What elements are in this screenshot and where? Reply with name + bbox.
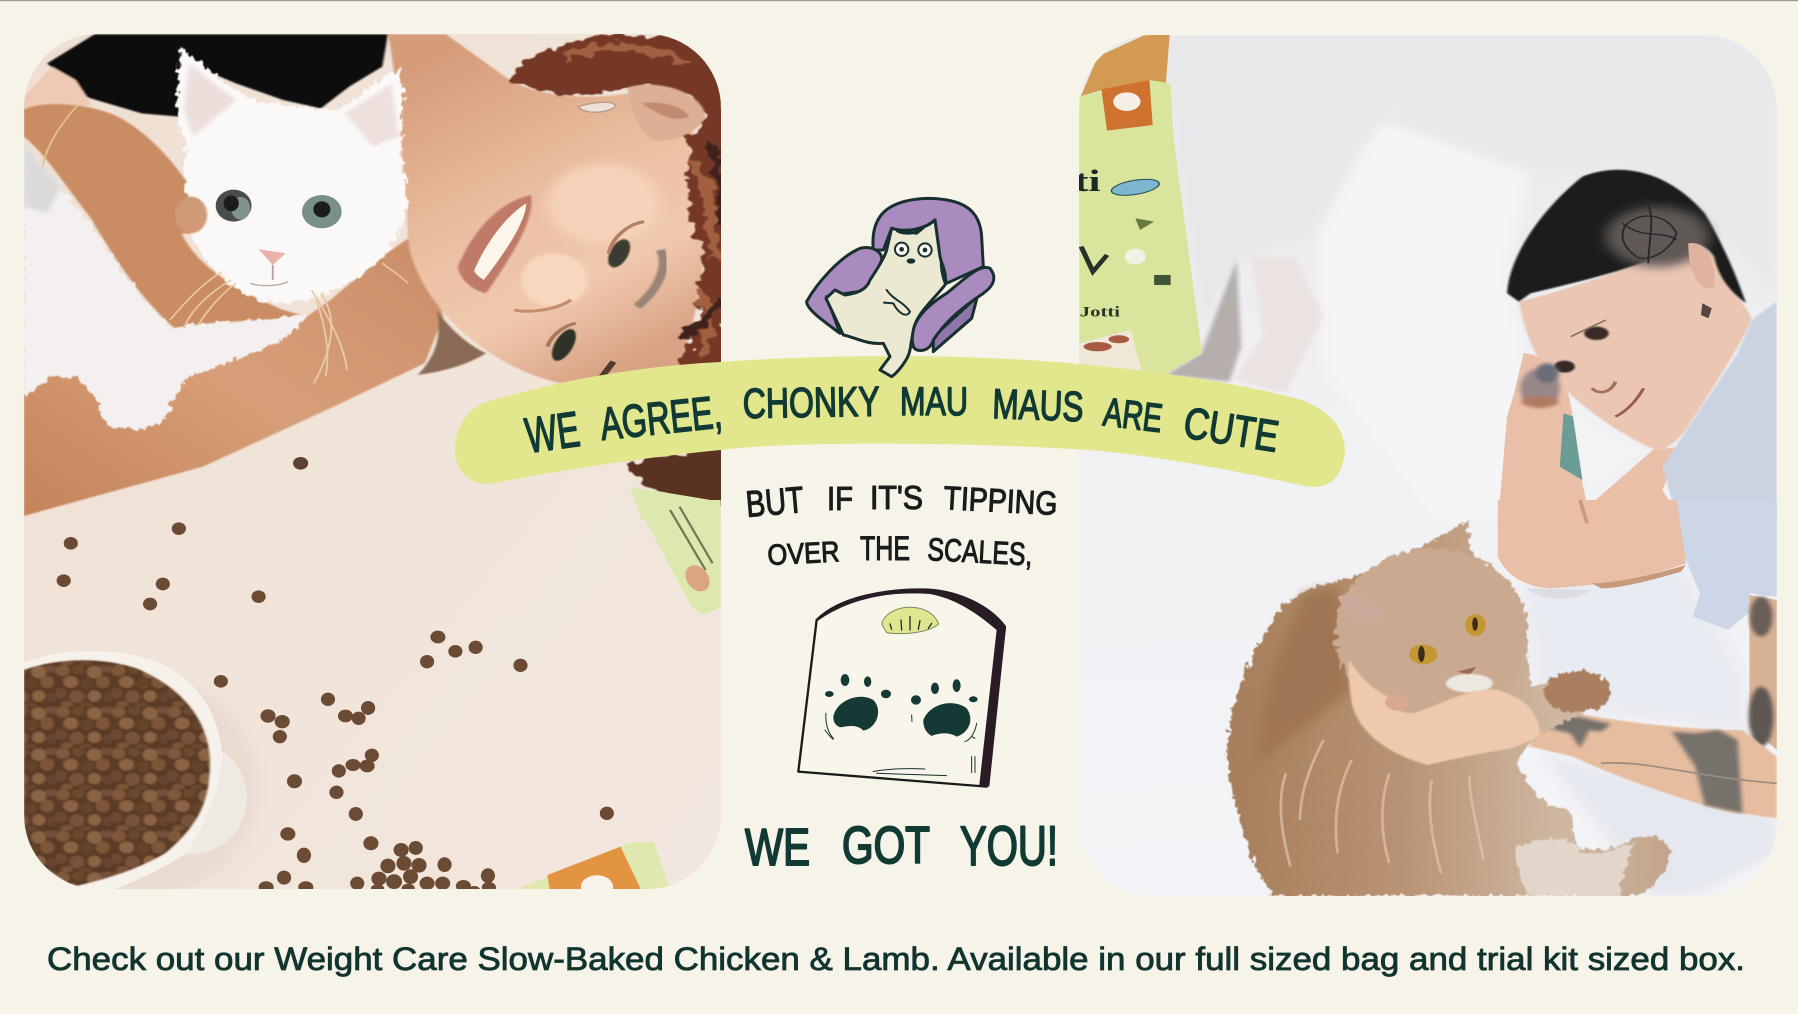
head tattoo [1622,197,1676,263]
right person head and arm [1596,447,1676,500]
fur strands [1281,740,1484,873]
scattered kibble [57,522,614,893]
paw [1545,671,1611,712]
text: but if it's tipping [744,479,1058,525]
eyes of person [607,238,632,268]
text: but if it's tipping: BUT [744,479,805,525]
thumb [175,197,207,233]
text: over the scales: OVER [767,536,840,572]
near forearm with tattoos [1531,705,1777,818]
text: we got you: WE [745,819,810,877]
white cat [24,47,407,430]
panel: right photo of person with ginger cat in bed [1074,35,1777,896]
banner text: CHONKY [742,378,880,427]
banner: curved green ribbon [455,356,1345,487]
hand holding cat [1348,660,1540,765]
scale dial [882,607,939,634]
kibble, bowl and packaging [14,500,721,900]
text: but if it's tipping: IF [827,480,853,517]
text: over the scales [767,530,1033,572]
far forearm [1749,595,1777,750]
text: but if it's tipping: IT'S [870,479,923,516]
bowl shadow [116,698,254,889]
cat eyes and nose [216,190,252,222]
arm under head [1498,353,1592,527]
product bag, pillows and person [1074,35,1777,527]
banner text: AGREE, [598,385,724,450]
cat eyes, nose and chin [1409,644,1437,664]
text: we got you [745,814,1058,877]
text: over the scales: THE [860,530,910,568]
earring [578,102,616,112]
shirt [1662,302,1777,520]
kibble in bowl [24,660,210,887]
pillows [1166,35,1777,520]
banner text: WE [522,401,583,464]
product card corner [630,487,721,520]
holding hand [24,104,307,328]
stray kibble [293,457,308,470]
shirt and upper arm [1498,500,1686,588]
smile [458,195,532,293]
banner text: MAUS [992,380,1084,430]
whiskers [170,263,408,383]
product bag: ti [1074,165,1101,198]
banner text: ARE [1101,390,1165,441]
icon: cat lounging on purple armchair [807,198,994,377]
icon: bathroom scale with paw prints [798,588,1006,787]
ear [628,85,705,141]
cat body [1227,520,1671,896]
banner text [522,378,1282,464]
footer caption: Check out our Weight Care Slow-Baked Chicken & Lamb. Available in our full sized bag and trial kit sized box. [47,941,1745,977]
bowl [24,651,247,889]
product card top right [646,500,721,615]
packaging box bottom [517,842,670,889]
paw prints [825,674,978,737]
text: but if it's tipping: TIPPING [943,479,1058,522]
text: we got you: YOU! [960,814,1058,877]
cat head [1335,548,1528,718]
hair [510,34,727,507]
ear and earring [1688,243,1715,288]
cheek and nose shading [547,163,661,243]
ginger cat, hand and forearm [1227,500,1777,896]
text: over the scales: SCALES, [927,531,1033,572]
panel: left photo of person with white cat and kibble [14,34,727,900]
bed shade [1532,575,1740,724]
product bag: Jotti [1080,304,1120,320]
banner text: MAU [900,380,968,424]
product bag [1074,35,1202,375]
banner text: CUTE [1180,398,1282,462]
face details [1584,327,1609,340]
text: we got you: GOT [842,817,930,875]
person, cat and arm [24,34,727,520]
